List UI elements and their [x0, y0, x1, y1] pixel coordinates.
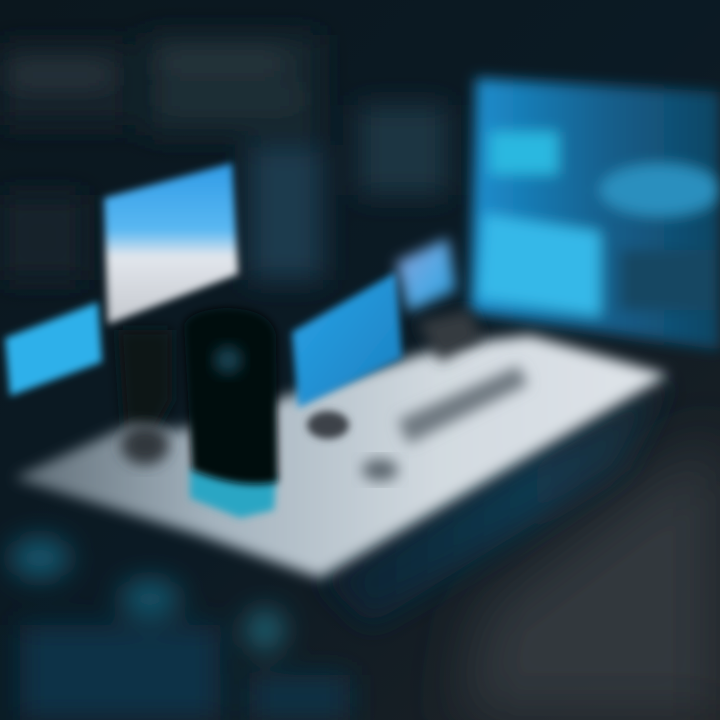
desk left object [121, 425, 169, 465]
tower emblem [214, 346, 242, 374]
small left screen [5, 302, 102, 396]
desk top [14, 335, 668, 578]
dark floor, lower right [460, 430, 720, 720]
centre screen [292, 272, 402, 408]
desk underside [320, 378, 668, 625]
small desk object [362, 459, 398, 481]
tower body [184, 308, 278, 484]
left monitor [104, 163, 238, 324]
keyboard [398, 366, 528, 444]
background panels [0, 35, 448, 280]
small rear screen [396, 238, 456, 312]
small device [418, 310, 482, 362]
monitor stand [118, 330, 172, 440]
lower left reflections [10, 538, 350, 720]
tower base glow [190, 468, 276, 518]
screen highlight: lower [478, 214, 600, 316]
large right screen [470, 78, 720, 350]
screen highlight: upper [490, 132, 558, 174]
phone tower [184, 308, 278, 518]
mouse [307, 411, 349, 439]
